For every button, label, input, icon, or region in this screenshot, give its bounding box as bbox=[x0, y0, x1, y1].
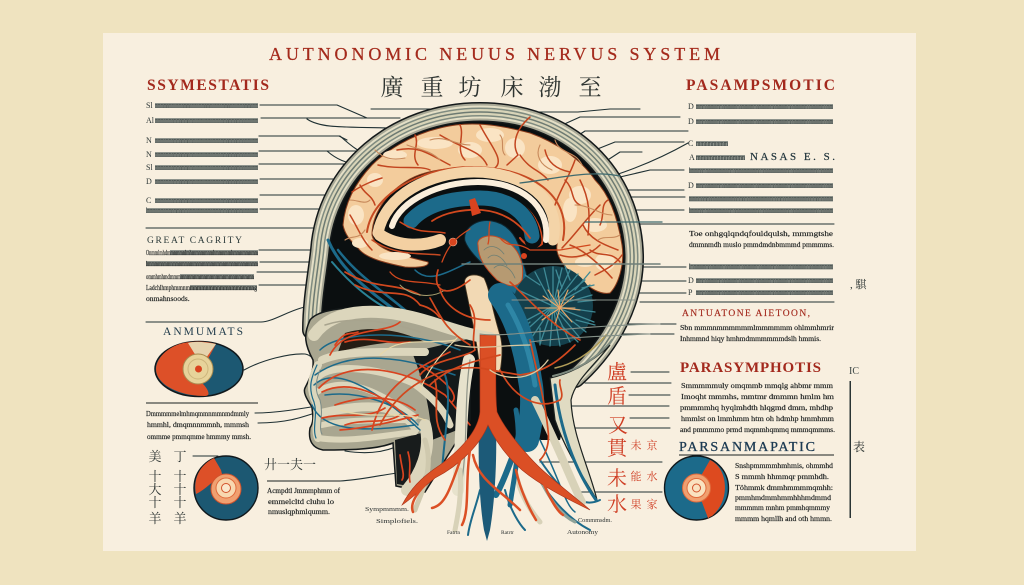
small red glyphs: 京 bbox=[646, 438, 658, 452]
label rows: N bbox=[146, 150, 152, 159]
panel: parsanmapatic bbox=[664, 440, 834, 523]
description: dmmnmdh muslo pmmdmdnbmmmd pmmmms. bbox=[689, 240, 834, 249]
heading: parsanmapatic: PARSANMAPATIC bbox=[679, 440, 815, 455]
vertical red glyphs: 盧 bbox=[607, 361, 627, 384]
panel: sympathetic labels: mmmnmmnmmnmmnmmnmmnmmnmmnmmnmmnmmnmmnmm bbox=[155, 150, 258, 159]
icon: left target disc bbox=[194, 456, 258, 520]
paragraph: pmmhmdmmhmmhhhmdmmd bbox=[735, 493, 831, 502]
label rows: Immmnmmnmmnmmnmmnmmnmmnmmnmmnmmnmmnmmnmmnmmnmmnmmnm bbox=[689, 262, 833, 271]
label rows: N bbox=[146, 136, 152, 145]
chinese subtitle: 廣 bbox=[380, 75, 404, 100]
panel: parasympathetic labels bbox=[686, 77, 866, 297]
paragraph: Snshpmmmmhmhmis, ohmmhd bbox=[735, 461, 833, 470]
panel: sympathetic labels: lmmmnmmnmmnmmnmmnmmnmmnmmnmmnmmnmmnmmnmmnmm bbox=[146, 206, 258, 215]
cerebellum bbox=[513, 266, 596, 346]
panel: great cavity bbox=[146, 236, 258, 303]
margin note: 表 bbox=[853, 440, 865, 454]
paragraph: mmmm hqmllh and oth hmmn. bbox=[735, 514, 832, 523]
paragraph bbox=[680, 381, 835, 434]
description bbox=[680, 323, 834, 343]
description: emmelcltd cluhu lo bbox=[268, 497, 334, 506]
small red glyphs: 未 bbox=[630, 438, 642, 452]
paragraph bbox=[735, 461, 833, 523]
panel: sympathetic labels bbox=[146, 77, 269, 215]
bottom labels: Ratrtr bbox=[501, 530, 514, 536]
label rows: hmmmnmmnmmnmmnmmnmmnmmnmmnmmnmmnmmnmmnmmnmmnmmnmmnmm bbox=[689, 206, 833, 215]
rule bbox=[146, 402, 258, 404]
text rows: Onmmlmhdmmnmmnlmhmmnmmnmhmmnmmhmmnmmnmm bbox=[146, 248, 258, 257]
label rows: C bbox=[146, 196, 151, 205]
description bbox=[267, 486, 340, 516]
label rows: mmnmmnmm bbox=[696, 139, 729, 148]
description: Inhmmnd hiqy hmhmdmmmmmmdslh hmmis. bbox=[680, 334, 821, 343]
vertical chinese glyphs left: 十 bbox=[148, 495, 162, 510]
label rows: mmmnmmnmmnmmnmmnmmnmmnmmnmmnmmnmmnmmnmmnmmnmmnmm bbox=[696, 276, 833, 285]
vertical chinese glyphs left: 十 bbox=[173, 495, 187, 510]
label rows: D bbox=[688, 276, 694, 285]
vertical chinese glyphs left: 大 bbox=[148, 482, 162, 497]
skull ring bbox=[312, 112, 634, 378]
description: Dmmmmmelmhmqmmnmmnmdmmly bbox=[146, 409, 249, 418]
small glyph: , 騏 bbox=[850, 277, 866, 291]
paragraph: Imoqht mmmhs, mmtmr dmmmn hmlm hm bbox=[681, 392, 834, 401]
label rows: Al bbox=[146, 116, 155, 125]
text rows bbox=[146, 248, 258, 303]
heading: great cavity: GREAT CAGRITY bbox=[147, 236, 242, 246]
label rows: D bbox=[146, 177, 152, 186]
small red glyphs: 水 bbox=[646, 469, 658, 483]
icon: right target disc bbox=[664, 456, 728, 520]
description bbox=[146, 409, 251, 441]
blue vein bbox=[500, 295, 532, 440]
label rows: mmnmmnmmnmmn bbox=[696, 153, 745, 162]
small red glyphs: 能 bbox=[630, 469, 642, 483]
label rows: mmmnmmnmmnmmnmmnmmnmmnmmnmmnmmnmmnmmnmmnmmnmmnmm bbox=[696, 117, 833, 126]
label rows: D bbox=[688, 102, 694, 111]
heading: anmumats: ANMUMATS bbox=[163, 326, 243, 338]
paragraph: Töhmmk dmmhmmmmqmhh: bbox=[735, 483, 833, 492]
vertical red glyphs bbox=[607, 361, 629, 516]
rule bbox=[267, 480, 340, 482]
description: Acmpdtl Jmmmphmm of bbox=[267, 486, 340, 495]
label rows: A bbox=[689, 153, 695, 162]
label rows: hmmmnmmnmmnmmnmmnmmnmmnmmnmmnmmnmmnmmnmmnmmnmmnmmnmm bbox=[689, 166, 833, 175]
chinese subtitle: 至 bbox=[578, 75, 602, 100]
vertical chinese glyphs left: 十 bbox=[173, 482, 187, 497]
vertical chinese glyphs left: 美 bbox=[148, 449, 162, 464]
vertical chinese glyphs left: 羊 bbox=[148, 511, 162, 526]
rule bbox=[679, 454, 834, 456]
panel: sympathetic labels: mmmnmmnmmnmmnmmnmmnmmnmmnmmnmmnmmnmmnmm bbox=[155, 177, 258, 186]
label rows: D bbox=[688, 117, 694, 126]
inner lobe and corpus bbox=[367, 167, 564, 255]
central blue column bbox=[479, 425, 496, 541]
paper panel bbox=[103, 33, 916, 551]
bottom labels: Autonomy bbox=[567, 529, 599, 536]
head and face bbox=[304, 308, 490, 492]
chinese subtitle: 重 bbox=[420, 75, 444, 100]
panel: annotated ellipse bbox=[146, 326, 258, 441]
paragraph: and pmmmmo prmd mqmmhqmmq mmmqmmms. bbox=[680, 425, 835, 434]
beige strands bbox=[312, 312, 490, 490]
dark gaps bbox=[412, 338, 472, 440]
text rows: Ladchlhmphmmnmmnmmnmmnmmnmmnmmng bbox=[146, 283, 257, 292]
anatomy illustration bbox=[304, 112, 662, 541]
description bbox=[689, 229, 834, 249]
panel: sympathetic labels: mmmmnmmnmmnmmnmmnmmnmmnmmnmmnmmnmmnmmnmm bbox=[155, 101, 258, 110]
vertical chinese glyphs left: 羊 bbox=[173, 511, 187, 526]
small heading glyphs: 廾一夫一 bbox=[264, 457, 316, 472]
skull interior bbox=[312, 112, 634, 440]
grey text bands bbox=[146, 103, 833, 295]
heading: sympathetic: SSYMESTATIS bbox=[147, 77, 269, 94]
label rows: mmmmnmmnmmnmmnmmnmmnmmnmmnmmnmmnmmnmmnmmnmmnmmnmmnmm bbox=[689, 194, 833, 203]
label rows: D bbox=[688, 181, 694, 190]
label rows bbox=[688, 102, 833, 215]
chinese subtitle: 坊 bbox=[458, 75, 482, 100]
heading: parasympathetic: PASAMPSMOTIC bbox=[686, 77, 835, 94]
title: AUTNONOMIC NEUUS NERVUS SYSTEM bbox=[269, 44, 720, 64]
chinese subtitle: 床 bbox=[500, 75, 524, 100]
gyri vessels bbox=[350, 117, 622, 278]
nerve lines across brain bbox=[462, 174, 662, 342]
vertical chinese glyphs left: 十 bbox=[173, 469, 187, 484]
label rows bbox=[688, 262, 833, 297]
vertical red glyphs: 貫 bbox=[607, 437, 629, 460]
label rows: Sl bbox=[146, 101, 153, 110]
label rows: P bbox=[688, 288, 693, 297]
chinese subtitle bbox=[380, 75, 602, 100]
panel: sympathetic labels: mmmnmmnmmnmmnmmnmmnmmnmmnmmnmmnmmnmmnmm bbox=[155, 196, 258, 205]
heading: parasymphotis: PARASYMPHOTIS bbox=[680, 360, 821, 376]
description: hmmhl, dmqmnnmmnh, mmmsh bbox=[147, 420, 249, 429]
vertical red glyphs: 水 bbox=[607, 493, 627, 516]
small red glyphs: 家 bbox=[646, 497, 658, 511]
margin note: IC bbox=[849, 366, 859, 377]
vertical chinese glyphs left: 丁 bbox=[173, 449, 187, 464]
description: nmuslqphmlqumm. bbox=[268, 507, 330, 516]
small red glyphs: 果 bbox=[630, 498, 642, 511]
heading: antuatone: ANTUATONE AIETOON, bbox=[682, 309, 810, 319]
label rows bbox=[146, 101, 258, 215]
vertical red glyphs: 未 bbox=[607, 467, 627, 490]
small red glyphs bbox=[630, 438, 658, 511]
bottom labels: Fatrtn bbox=[447, 530, 460, 536]
paragraph: S mmmh hhmmqr pmmhdh. bbox=[735, 472, 829, 481]
red strands bbox=[319, 322, 470, 482]
label rows: Sl bbox=[146, 163, 153, 172]
neck muscle back bbox=[550, 345, 610, 500]
central nerve fibres bbox=[415, 360, 600, 535]
vertical chinese glyphs left bbox=[148, 449, 187, 526]
vertical red glyphs: 又 bbox=[608, 415, 628, 437]
panel: sympathetic labels: mmmnmmnmmnmmnmmnmmnmmnmmnmmnmmnmmnmmnmm bbox=[155, 116, 258, 125]
panel: sympathetic labels: mmmnmmnmmnmmnmmnmmnmmnmmnmmnmmnmmnmmnmm bbox=[155, 136, 258, 145]
cream spinal column bbox=[465, 275, 502, 372]
text rows: hmmmmnmmnmmnmmnmmnmmnmmnmmnmmnmmnmmnmm bbox=[146, 259, 258, 268]
panel: parasympathetic description bbox=[680, 360, 835, 434]
red artery bbox=[380, 270, 590, 525]
gyri highlights bbox=[348, 128, 615, 271]
paragraph: pmmmmhq hyqlmhdth hlqgmd dmm, mhdhp bbox=[680, 403, 833, 412]
nasal label: NASAS E. S. bbox=[750, 151, 835, 163]
vertical red glyphs: 盾 bbox=[607, 385, 627, 408]
brain stem bbox=[442, 198, 590, 300]
paragraph: Smmmmmuly omqmmb mmqlg ahbmr mmm bbox=[681, 381, 833, 390]
bottom labels: Commmsdm. bbox=[578, 517, 612, 524]
panel: sympathetic labels: mmmnmmnmmnmmnmmnmmnmmnmmnmmnmmnmmnmmnmm bbox=[155, 163, 258, 172]
vertical chinese glyphs left: 十 bbox=[148, 469, 162, 484]
bottom labels bbox=[365, 506, 612, 536]
label rows: mmmnmmnmmnmmnmmnmmnmmnmmnmmnmmnmmnmmnmmnmmnmmnmm bbox=[696, 102, 833, 111]
brain lobes bbox=[343, 117, 623, 293]
label rows: mmmnmmnmmnmmnmmnmmnmmnmmnmmnmmnmmnmmnmmnmmnmmnmm bbox=[696, 288, 833, 297]
text rows: ommhmhmdmmmmnmmnmmnmmnmmnmmnmmnmmn bbox=[146, 272, 254, 281]
panel: autonomic action bbox=[680, 309, 834, 343]
bottom labels: Simplofiels. bbox=[376, 518, 418, 525]
chinese subtitle: 渤 bbox=[538, 75, 562, 100]
blue strands bbox=[311, 335, 460, 438]
description: Toe onhgqlqndqfouldqulsh, mmmgtshe bbox=[689, 229, 834, 238]
strands under brain bbox=[328, 240, 470, 345]
description: ommme pmmqmme hmmmy mmsh. bbox=[147, 432, 251, 441]
margin note bbox=[849, 366, 865, 518]
leader lines bbox=[146, 105, 834, 492]
paragraph: hmmlst on lmmhmm htm oh hdmhp hmmhmm bbox=[681, 414, 834, 423]
description: Sbn mmmnmmmmmmlmmmmmm ohlmmhmrir bbox=[680, 323, 834, 332]
icon: tri-colour ellipse bbox=[155, 342, 243, 396]
paragraph: mmmmm mnhm pmmhqmmmy bbox=[735, 503, 830, 512]
text rows: onmahnsoods. bbox=[146, 294, 190, 303]
label rows: mmmnmmnmmnmmnmmnmmnmmnmmnmmnmmnmmnmmnmmnmmnmmnmm bbox=[696, 181, 833, 190]
bottom labels: Sympmmmm. bbox=[365, 506, 409, 513]
label rows: C bbox=[688, 139, 693, 148]
